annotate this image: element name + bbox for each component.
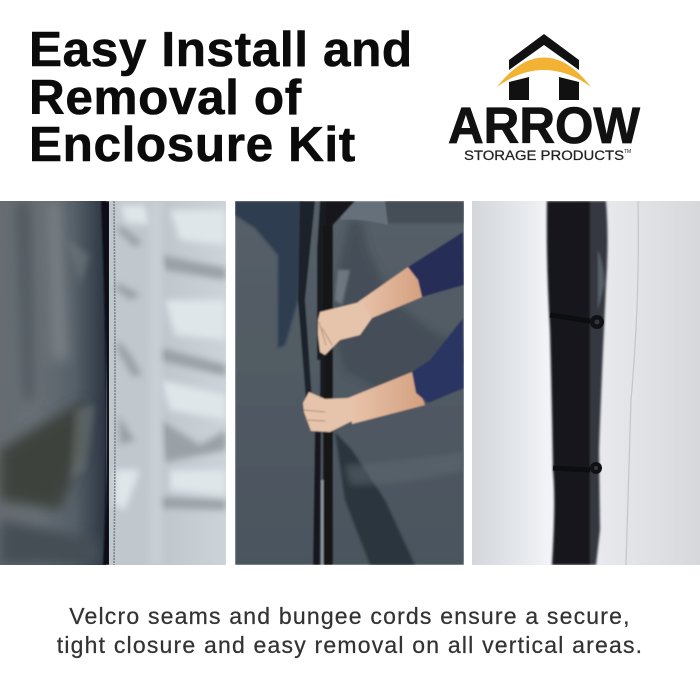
title: Enclosure Kit: [29, 117, 356, 172]
icon: house roof: [509, 34, 579, 70]
dark velcro flap: [590, 201, 608, 565]
bungee cord lower: [553, 462, 602, 474]
logo wordmark: ARROW: [448, 97, 641, 154]
title: Removal of: [29, 70, 302, 124]
icon: house left wall: [509, 77, 529, 100]
title: Easy Install and: [29, 22, 413, 77]
seam stitching: [114, 201, 115, 565]
light fabric: [109, 201, 226, 565]
panel: person opening velcro seam: [235, 201, 464, 565]
caption: Velcro seams and bungee cords ensure a secure,: [69, 603, 631, 629]
lower hand: [303, 392, 354, 432]
panel: velcro seam closed: [0, 201, 226, 565]
caption: tight closure and easy removal on all vertical areas.: [57, 632, 643, 658]
logo: Arrow Storage Products: [448, 34, 641, 163]
panel: bungee cords on pole: [472, 201, 700, 565]
logo trademark: TM: [624, 149, 631, 155]
grey enclosure fabric: [235, 201, 464, 565]
icon: yellow arc: [497, 58, 591, 87]
title: [29, 22, 413, 172]
icon: house right wall: [559, 77, 579, 100]
shadows on fabric: [235, 201, 464, 565]
seam line: [626, 201, 638, 565]
velcro straps: [298, 201, 355, 565]
lower sleeve: [412, 318, 464, 403]
lower arm: [303, 318, 464, 432]
upper sleeve: [408, 232, 464, 297]
upper hand: [318, 302, 372, 355]
photo panels: [0, 201, 700, 565]
upper arm: [318, 232, 464, 355]
black seam shadow: [101, 201, 110, 565]
logo tagline: STORAGE PRODUCTS: [464, 148, 624, 163]
white fabric: [472, 201, 700, 565]
bungee cord upper: [550, 315, 604, 329]
dark fabric: [0, 201, 106, 565]
black pole: [547, 201, 608, 565]
caption: [56, 603, 643, 658]
